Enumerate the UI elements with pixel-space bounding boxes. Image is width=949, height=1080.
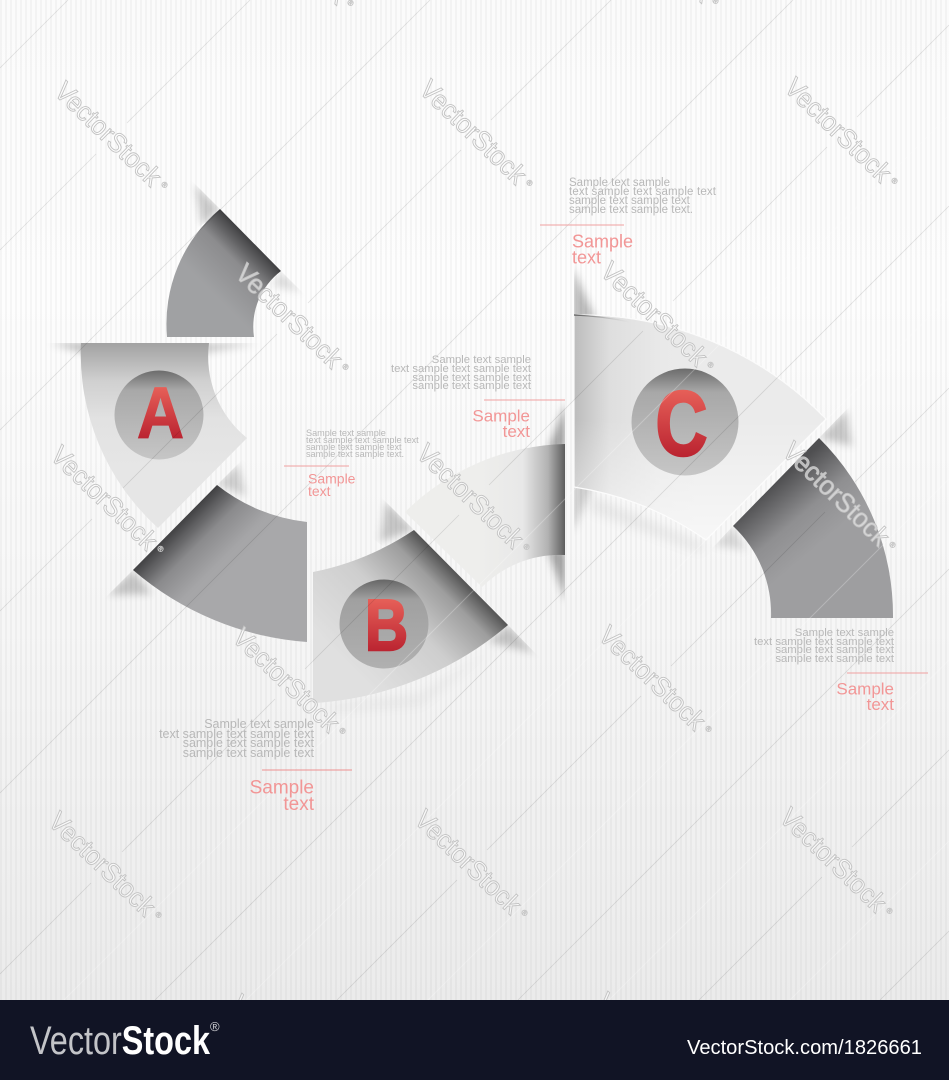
text block: below band C: sample text sample text <box>775 653 895 665</box>
watermark row 1: ® <box>524 178 535 188</box>
text block: below band C: sample text sample text <box>775 644 895 656</box>
registered mark: ® <box>210 1019 220 1034</box>
watermark row 2: VectorStock <box>595 256 714 372</box>
watermark row 4: VectorStock <box>593 620 712 736</box>
watermark row 3: VectorStock <box>45 440 164 556</box>
text block: below panel B: text sample text sample text <box>159 727 315 741</box>
red rule <box>540 224 624 226</box>
red heading: text <box>283 794 315 815</box>
footer logo: VectorStock <box>30 1019 211 1063</box>
arrowhead top: dark band above panel A <box>166 209 281 337</box>
red heading: Sample <box>836 680 894 698</box>
watermark row 2 <box>230 256 721 382</box>
text block: top right of arrow B: text sample text sample text <box>569 186 717 198</box>
footer url: VectorStock.com/1826661 <box>687 1037 922 1059</box>
text block: top right of arrow B: sample text sample text. <box>569 204 693 216</box>
watermark row 5: ® <box>153 910 164 920</box>
text block: centre small: sample text sample text. <box>306 449 404 459</box>
watermark row 1: ® <box>159 180 170 190</box>
light band right of panel B <box>405 444 565 587</box>
watermark row 5: ® <box>884 906 895 916</box>
watermark row 5: ® <box>519 908 530 918</box>
watermark row 1: VectorStock <box>49 76 168 192</box>
text block: centre small: text sample text sample text <box>306 435 419 445</box>
text block: below band C: Sample text sample <box>795 627 894 639</box>
watermark row 4 <box>227 620 719 746</box>
watermark row 3: VectorStock <box>411 438 530 554</box>
watermark row 5: VectorStock <box>409 804 528 920</box>
red rule <box>484 400 565 401</box>
footer bar <box>0 1000 949 1080</box>
text block: below band C <box>754 627 928 714</box>
text block: below panel B <box>159 717 352 815</box>
text block: below panel B: sample text sample text <box>183 746 315 760</box>
watermark row 2: ® <box>340 362 351 372</box>
red rule <box>847 672 928 674</box>
watermark row 1: ® <box>889 176 900 186</box>
watermark row 3: ® <box>521 542 532 552</box>
watermark row 5: VectorStock <box>43 806 162 922</box>
circle B <box>340 580 428 668</box>
letter C: C <box>656 373 708 475</box>
watermark row 0 (cropped) <box>235 0 726 18</box>
watermark row 4: VectorStock <box>227 622 346 738</box>
red heading: text <box>503 422 530 441</box>
watermark row 6 (cropped) <box>225 987 710 1080</box>
text block: below band C: text sample text sample text <box>754 636 895 648</box>
text block: above light band: sample text sample text <box>412 380 532 392</box>
soft shadows around the paper cuts <box>54 186 854 654</box>
red heading: text <box>572 248 601 268</box>
watermark row 1: VectorStock <box>414 74 533 190</box>
letter B: B <box>365 586 408 666</box>
text block: below panel B: Sample text sample <box>204 717 314 731</box>
red heading: Sample <box>472 406 530 426</box>
red heading: Sample <box>250 778 314 798</box>
dark band below panel C <box>733 438 893 618</box>
watermark row 4: ® <box>337 726 348 736</box>
dark band below panel A <box>133 485 307 642</box>
watermark row 5: VectorStock <box>774 802 893 918</box>
text block: above light band: Sample text sample <box>432 354 531 366</box>
red heading: text <box>867 695 894 714</box>
red rule <box>262 770 352 771</box>
watermark row 3: ® <box>155 544 166 554</box>
text block: above light band: sample text sample text <box>412 372 532 384</box>
panel A <box>81 343 247 528</box>
watermark row 2: VectorStock <box>230 258 349 374</box>
watermark row 3 <box>45 436 903 564</box>
text block: above light band: text sample text sample text <box>391 363 532 375</box>
watermark row 1 <box>49 72 905 200</box>
watermark row 3: VectorStock <box>777 436 896 552</box>
circle C <box>632 368 738 476</box>
red heading: Sample <box>308 470 356 486</box>
text block: top right of arrow B: sample text sample text <box>569 195 691 207</box>
text block: top right of arrow B: Sample text sample <box>569 177 670 189</box>
text block: centre small: sample text sample text <box>306 442 402 452</box>
watermark row 5 <box>43 802 900 930</box>
red heading: Sample <box>572 232 633 252</box>
panel C <box>574 315 826 540</box>
text block: below panel B: sample text sample text <box>183 736 315 750</box>
text block: top right of arrow B <box>540 177 717 268</box>
watermark row 4: ® <box>703 724 714 734</box>
letter A: A <box>137 374 184 454</box>
circle A <box>114 370 204 460</box>
watermark row 2: ® <box>705 360 716 370</box>
panel B <box>313 530 508 703</box>
text block: above light band <box>391 354 565 441</box>
watermark row 1: VectorStock <box>779 72 898 188</box>
red heading: text <box>308 483 331 499</box>
watermark row 3: ® <box>887 540 898 550</box>
text block: centre small: Sample text sample <box>306 428 386 438</box>
text block: centre small <box>284 428 419 499</box>
red rule <box>284 466 349 467</box>
